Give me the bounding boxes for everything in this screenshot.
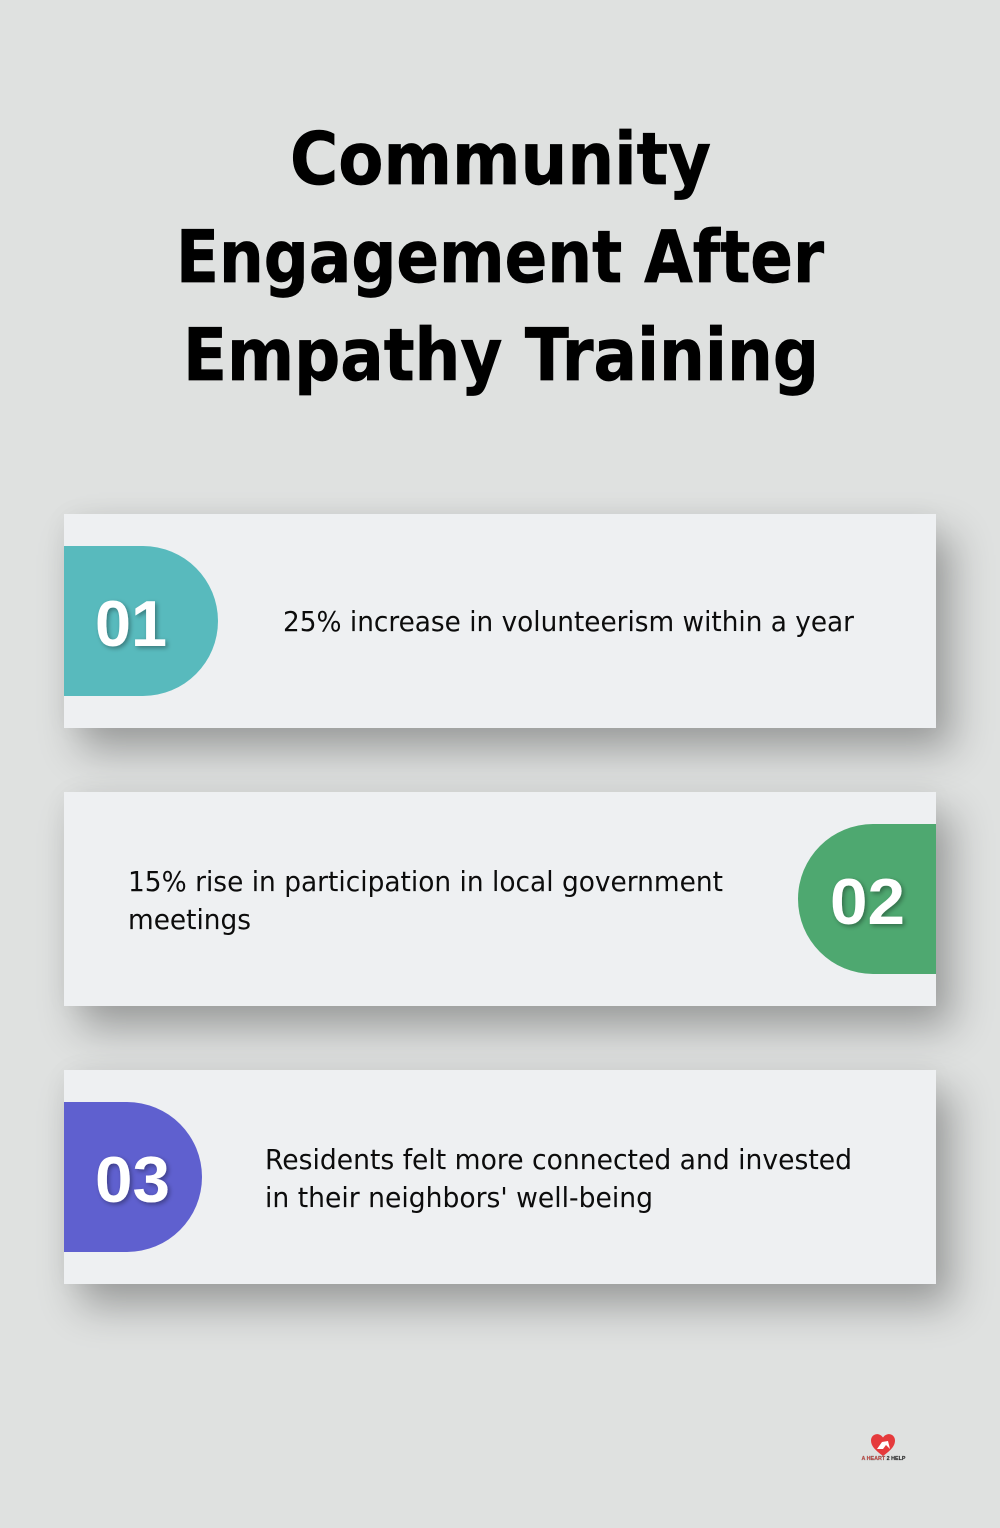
- text: residents: in their neighbors' well-being: [265, 1181, 653, 1214]
- title: [176, 117, 824, 397]
- title: Engagement After: [176, 215, 824, 299]
- text: residents: Residents felt more connected and invested: [265, 1143, 852, 1176]
- badge: 01: [64, 546, 218, 696]
- logo text: A HEART 2 HELP: [862, 1456, 906, 1462]
- badge: 01: 01: [95, 587, 167, 660]
- text: residents: [265, 1143, 852, 1214]
- text: local government: 15% rise in participation in local government: [128, 865, 723, 898]
- icon: heart: [871, 1434, 895, 1456]
- text: volunteerism: 25% increase in volunteerism within a year: [283, 605, 854, 638]
- item 1: [64, 546, 854, 696]
- text: local government: [128, 865, 723, 936]
- card 3 background: [64, 1070, 936, 1284]
- title: Community: [290, 117, 711, 201]
- logo: [862, 1434, 906, 1462]
- badge: 02: 02: [830, 865, 905, 938]
- badge: 03: [64, 1102, 202, 1252]
- item 3: [64, 1102, 852, 1252]
- card 1 background: [64, 514, 936, 728]
- text: local government: meetings: [128, 903, 251, 936]
- card 2 background: [64, 792, 936, 1006]
- badge: 02: [798, 824, 936, 974]
- item 2: [128, 824, 936, 974]
- title: Empathy Training: [183, 313, 819, 397]
- badge: 03: 03: [95, 1143, 170, 1216]
